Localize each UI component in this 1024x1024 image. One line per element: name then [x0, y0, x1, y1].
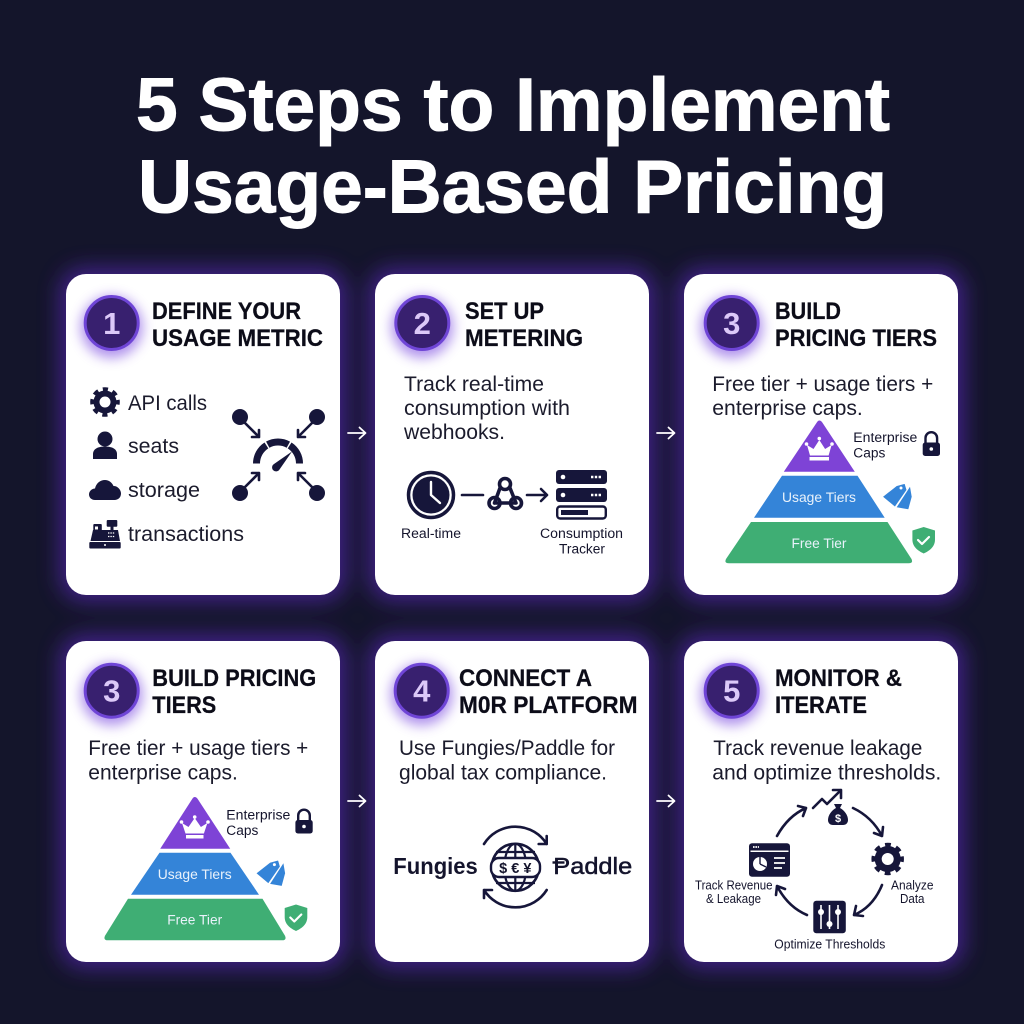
heading: step 4: CONNECT A — [459, 665, 592, 692]
panel: step 3 build pricing tiers — [684, 274, 958, 595]
text: API calls: API calls — [128, 392, 207, 415]
badge: step 3 — [701, 296, 763, 358]
text: seats: seats — [128, 435, 179, 458]
text: description — [712, 373, 933, 420]
icon: globe with currencies and exchange arrows — [484, 827, 547, 907]
badge: step 4: 4 — [413, 674, 431, 708]
text: description: global tax compliance. — [399, 761, 607, 784]
text: description — [403, 373, 570, 444]
icon: gauge with converging metrics — [232, 409, 325, 501]
icon: globe with currencies and exchange arrows: $ € ¥ — [499, 861, 531, 877]
heading: step 4: M0R PLATFORM — [459, 692, 638, 719]
text: description: enterprise caps. — [712, 397, 863, 420]
panel: step 3 build pricing tiers (second row) — [66, 641, 340, 962]
icon: person — [93, 432, 117, 459]
text: storage: storage — [128, 479, 200, 502]
text: optimize thresholds label: Optimize Thresholds — [774, 938, 885, 952]
text: description: Use Fungies/Paddle for — [399, 737, 615, 760]
panel: step 1 define your usage metric — [66, 274, 340, 595]
heading: step 5: ITERATE — [775, 692, 867, 719]
text: description: Free tier + usage tiers + — [88, 737, 308, 760]
heading: step 3 — [775, 298, 937, 352]
panel: step 5 monitor and iterate — [684, 641, 958, 962]
chart: pricing pyramid — [104, 797, 286, 940]
text: real-time label: Real-time — [401, 526, 461, 541]
text: description: Track revenue leakage — [713, 737, 922, 760]
icon: shield — [285, 904, 307, 931]
panel: step 4 connect a mor platform — [375, 641, 649, 962]
icon: webhook — [489, 478, 522, 508]
icon: sliders — [813, 901, 846, 933]
arrow: step 1 to 2 — [348, 428, 366, 438]
badge: step 5 — [701, 664, 763, 726]
cycle arrows — [776, 806, 883, 916]
title: 5 Steps to Implement — [136, 62, 890, 146]
heading: step 5 — [775, 665, 902, 719]
icon: price tag — [882, 483, 912, 509]
panel: step 2 set up metering — [375, 274, 649, 595]
heading: step 3 repeat: BUILD PRICING — [152, 665, 316, 692]
heading: step 2: METERING — [465, 325, 583, 352]
text: description: Track real-time — [404, 373, 544, 396]
arrow: row 2 first — [348, 796, 366, 806]
text: description: Free tier + usage tiers + — [712, 373, 933, 396]
icon: revenue trend with money bag: $ — [835, 813, 841, 825]
badge: step 1 — [81, 296, 143, 358]
heading: step 3: BUILD — [775, 298, 841, 325]
text: enterprise caps label: Caps — [853, 446, 886, 460]
text: description: consumption with — [404, 397, 570, 420]
logo: Fungies: Fungies — [393, 853, 478, 879]
text: enterprise caps label — [853, 430, 917, 460]
text: enterprise caps label: Caps — [226, 823, 259, 838]
chart: pricing pyramid — [725, 420, 912, 563]
icon: cash register — [89, 520, 121, 548]
badge: step 3: 3 — [723, 306, 740, 341]
text: enterprise caps label: Enterprise — [853, 430, 917, 445]
connector line — [462, 494, 483, 496]
text: transactions: transactions — [128, 523, 244, 546]
text: description: and optimize thresholds. — [712, 761, 941, 784]
chart: pricing pyramid: Usage Tiers — [782, 489, 856, 505]
heading: step 2 — [465, 298, 583, 352]
icon: shield — [912, 527, 935, 554]
logo: Paddle: Paddle — [553, 853, 632, 879]
text: analyze data label — [891, 878, 934, 906]
icon: crown — [805, 437, 834, 460]
arrow: step 2 to 3 — [657, 428, 674, 438]
chart: pricing pyramid: Free Tier — [167, 912, 223, 928]
text: analyze data label: Analyze — [891, 878, 934, 892]
text: analyze data label: Data — [900, 892, 925, 906]
arrow: webhook to tracker — [527, 489, 547, 501]
text: consumption tracker label — [540, 526, 623, 556]
icon: revenue trend with money bag — [813, 790, 848, 825]
icon: server stack — [556, 470, 607, 518]
badge: step 4 — [391, 664, 453, 726]
title: Usage-Based Pricing — [138, 144, 887, 228]
text: enterprise caps label — [226, 808, 290, 838]
badge: step 3 repeat: 3 — [103, 674, 120, 708]
icon: crown — [180, 815, 210, 838]
text: track revenue label: Track Revenue — [695, 878, 773, 892]
arrow: row 2 second — [657, 796, 674, 806]
icon: lock — [923, 432, 940, 456]
badge: step 5: 5 — [723, 674, 740, 708]
icon: clock — [408, 472, 454, 518]
icon: price tag — [256, 860, 285, 886]
icon: lock — [295, 810, 313, 834]
heading: step 1: USAGE METRIC — [152, 325, 323, 352]
text: track revenue label: & Leakage — [706, 892, 761, 906]
text: description — [88, 737, 308, 784]
badge: step 2: 2 — [414, 306, 431, 341]
text: consumption tracker label: Tracker — [559, 542, 605, 556]
heading: step 3 repeat — [152, 665, 316, 719]
icon: gear — [93, 390, 117, 414]
heading: step 2: SET UP — [465, 298, 544, 325]
heading: step 3 repeat: TIERS — [152, 692, 216, 719]
icon: cloud — [89, 480, 121, 500]
text: description — [399, 737, 615, 784]
badge: step 1: 1 — [103, 306, 120, 341]
heading: step 1 — [152, 298, 323, 352]
heading: step 1: DEFINE YOUR — [152, 298, 301, 325]
heading: step 4 — [459, 665, 638, 719]
heading: step 5: MONITOR & — [775, 665, 902, 692]
text: track revenue label — [695, 878, 773, 906]
heading: step 3: PRICING TIERS — [775, 325, 937, 352]
icon: dashboard window — [749, 843, 790, 877]
badge: step 3 repeat — [81, 664, 143, 726]
text: description — [712, 737, 941, 784]
badge: step 2 — [391, 296, 453, 358]
icon: gear — [874, 846, 901, 872]
chart: pricing pyramid: Free Tier — [792, 535, 847, 551]
text: consumption tracker label: Consumption — [540, 526, 623, 541]
chart: pricing pyramid: Usage Tiers — [158, 866, 232, 882]
text: description: enterprise caps. — [88, 761, 238, 784]
title — [136, 62, 890, 228]
text: description: webhooks. — [403, 421, 505, 444]
text: enterprise caps label: Enterprise — [226, 808, 290, 822]
